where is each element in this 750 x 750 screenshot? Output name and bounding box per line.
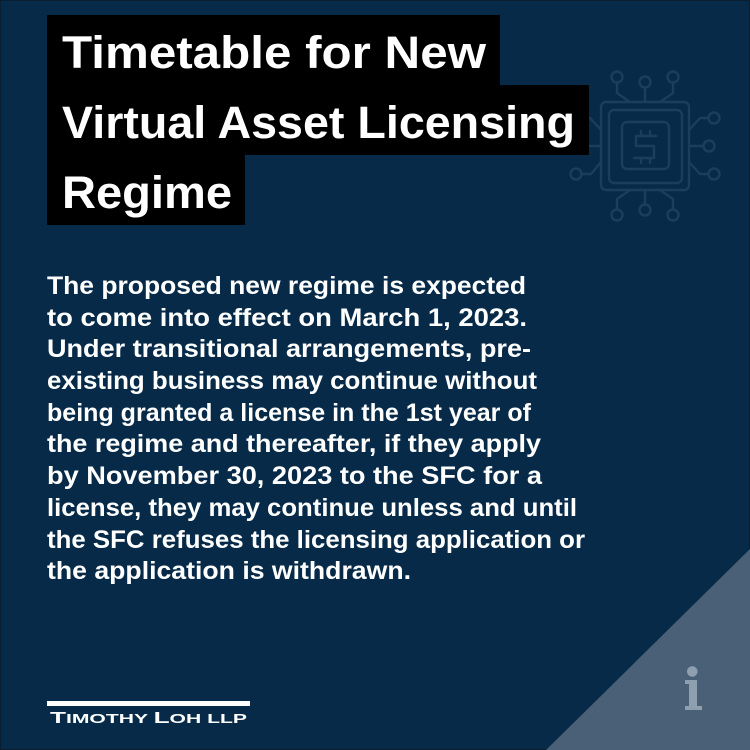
body text: to come into effect on March 1, 2023.	[47, 304, 527, 332]
body text: The proposed new regime is expected	[47, 272, 526, 300]
body text: Under transitional arrangements, pre-	[47, 335, 531, 363]
logo: Timothy Loh LLP: T IMOTHY L OH LLP	[50, 710, 247, 727]
body text: the regime and thereafter, if they apply	[47, 430, 541, 458]
body text	[47, 272, 585, 585]
icon: information letter i	[685, 666, 702, 710]
body text: license, they may continue unless and until	[47, 494, 577, 522]
title	[47, 15, 589, 225]
body text: being granted a license in the 1st year of	[47, 399, 532, 427]
body text: by November 30, 2023 to the SFC for a	[47, 462, 543, 490]
title: Timetable for New	[62, 27, 487, 78]
body text: existing business may continue without	[47, 367, 538, 395]
title: Virtual Asset Licensing	[62, 97, 575, 148]
body text: the SFC refuses the licensing application or	[47, 526, 585, 554]
icon: virtual asset chip with dollar sign	[570, 72, 720, 220]
logo: Timothy Loh LLP	[47, 701, 250, 727]
body text: the application is withdrawn.	[47, 557, 411, 585]
title: Regime	[62, 167, 232, 218]
corner triangle	[546, 549, 750, 750]
